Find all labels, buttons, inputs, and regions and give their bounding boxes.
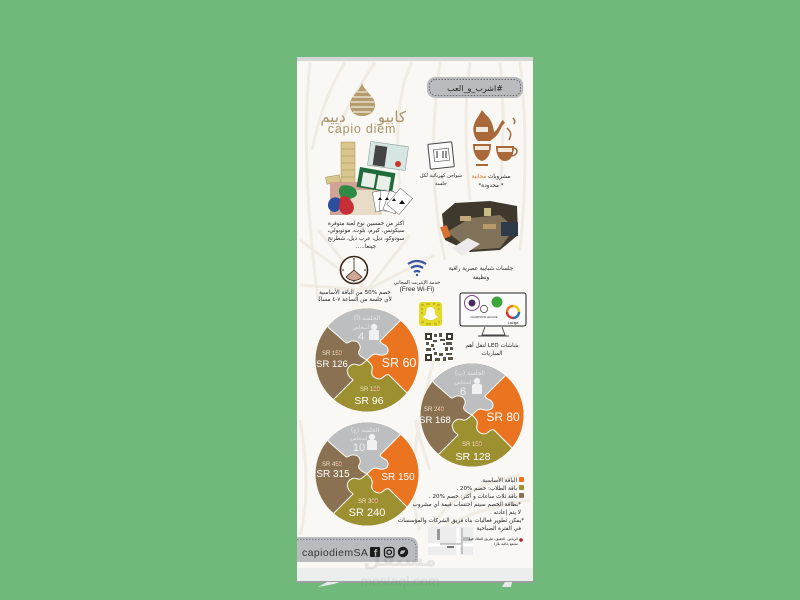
social footer bar (297, 537, 418, 562)
puzzle circle: session C: SR 450 (322, 462, 343, 468)
discount text (318, 288, 392, 303)
puzzle circle: session B: SR 150 (462, 442, 483, 448)
puzzle circle: session A: 4 (358, 331, 364, 343)
room text (449, 266, 514, 281)
puzzle circle: session C (307, 404, 437, 544)
free drinks text: مشروبات مجانية (472, 174, 510, 180)
address: الرياض، العقيق، طريق الملك فهد (468, 537, 518, 541)
puzzle circle: session C: SR 315 (316, 469, 350, 480)
discount text: لأي جلسة من الساعة ٧-٤ مساءً (318, 295, 392, 303)
puzzle circle: session B: SR 240 (424, 407, 445, 413)
wifi text: (Free Wi-Fi) (400, 286, 434, 293)
logo latin name: capio diem (328, 122, 396, 136)
discount text: خصم %50 من الباقة الأساسية (319, 288, 391, 296)
wifi text (394, 280, 440, 293)
legend notes: الباقة الأساسية. (481, 476, 517, 484)
pricing legend (398, 476, 524, 532)
socket text: شواحن كهربائية لكل (420, 173, 462, 179)
legend notes: *يمكن تطوير فعاليات بناء فريق الشركات والمؤسسات (398, 517, 524, 524)
puzzle circle: session A: SR 126 (316, 359, 348, 370)
puzzle circle: session A: SR 150 (322, 351, 343, 357)
puzzle circle: session A: أشخاص (353, 324, 370, 331)
puzzle circle: session B: SR 80 (486, 410, 520, 424)
games text (327, 219, 405, 250)
puzzle circle: session B: أشخاص (455, 379, 472, 386)
address: مجمع عالية بلازا (494, 542, 518, 546)
room text: ونظيفة (473, 275, 489, 281)
icon: map pin (519, 538, 523, 542)
QR code (425, 333, 453, 361)
logo (320, 83, 407, 136)
games text: أكثر من خمسين نوع لعبة متوفرة (328, 219, 404, 227)
icon: power socket (428, 142, 454, 169)
icon: twitter (398, 547, 408, 557)
screens text (465, 341, 519, 357)
logo arabic word right: كابيو (377, 108, 407, 126)
puzzle circle: session B (412, 345, 542, 485)
legend notes: في الفترة الصباحية (477, 526, 521, 532)
socket text: جلسة (435, 181, 447, 187)
free drinks text: * محدودة* (478, 183, 504, 189)
base feet (318, 582, 512, 587)
games illustration (326, 141, 413, 215)
logo drop mark (350, 83, 375, 116)
socket text (420, 173, 462, 187)
address (468, 537, 523, 546)
roll-up banner (297, 57, 533, 587)
free drinks text (472, 174, 510, 189)
legend notes: باقة ثلاث ساعات و أكثر: خصم %20 . (429, 492, 517, 500)
icon: teapot and cups (473, 110, 517, 166)
games text: سودوكو، ديل، عرب ديل، شطرنج (328, 235, 405, 242)
puzzle circle: session B: SR 128 (455, 451, 491, 463)
puzzle circle: session C: SR 300 (358, 499, 379, 505)
watermark: mostaql.com (360, 573, 440, 589)
icon: wifi (408, 261, 426, 276)
icon: LED screen with league logos: CHAMPIONS LEAGUE (471, 315, 498, 319)
playing cards (372, 188, 413, 215)
premier league logo (464, 296, 480, 310)
wifi text: خدمة الإنترنت المجاني (394, 280, 440, 286)
screens text: شاشات LED لنقل أهم (465, 341, 519, 349)
bottom base (297, 568, 533, 583)
icon: snapchat code (419, 302, 442, 326)
champions league ball (480, 305, 488, 313)
icon: LED screen with league logos: LaLiga (508, 321, 518, 325)
puzzle circle: session B: SR 168 (419, 415, 451, 426)
location map (428, 527, 473, 555)
icon: facebook: f (374, 548, 378, 560)
legend notes (398, 476, 524, 532)
jenga tower (326, 142, 355, 184)
puzzle circle: session C: SR 150 (381, 472, 415, 483)
la liga logo (507, 306, 519, 318)
saudi league logo (492, 296, 502, 308)
logo arabic word left: دييم (320, 108, 346, 126)
watermark (360, 547, 440, 589)
room text: جلسات شبابية عصرية راقية (449, 266, 514, 272)
legend notes: لا يتم إعادته . (490, 510, 521, 516)
watermark: مستقل (363, 547, 437, 571)
puzzle circle: session C: 10 (353, 442, 365, 454)
puzzle circle: session C: SR 240 (349, 507, 385, 519)
top rail (297, 57, 533, 61)
hashtag pill (427, 77, 523, 98)
legend notes: *بطاقة الخصم سيتم احتساب قيمة أي مشروب (413, 500, 521, 508)
puzzle circle: session A (307, 290, 437, 430)
puzzle circle: session B: 6 (460, 386, 466, 398)
legend swatches (519, 477, 524, 498)
icon: instagram (384, 548, 394, 557)
icon: LED screen with league logos (460, 293, 526, 336)
screens text: المباريات (481, 351, 503, 357)
board (330, 182, 380, 215)
puzzle circle: session B: الجلسة (ب) (455, 370, 485, 377)
legend notes: باقة الطلاب: خصم %20 . (456, 486, 517, 492)
games text: جينغا..... (356, 244, 377, 250)
banner sheet (297, 60, 533, 570)
hashtag pill: #اشرب_و_العب (447, 84, 503, 93)
puzzle circle: session A: الجلسة (أ) (354, 314, 380, 322)
puzzle circle: session A: SR 60 (382, 356, 416, 370)
puzzle circle: session A: SR 96 (354, 395, 384, 407)
green card case (357, 167, 395, 193)
game box (368, 141, 408, 171)
handle: capiodiemSA (302, 547, 368, 559)
icon: clock (340, 256, 368, 284)
coloured pieces (339, 185, 357, 199)
puzzle circle: session A: SR 120 (360, 387, 381, 393)
games text: سيكونس، كيرم، بلوت، مونوبولي، (327, 227, 405, 234)
room photo (440, 201, 518, 256)
puzzle circle: session C: أشخاص (351, 435, 368, 442)
puzzle circle: session C: الجلسة (ج) (351, 427, 380, 434)
